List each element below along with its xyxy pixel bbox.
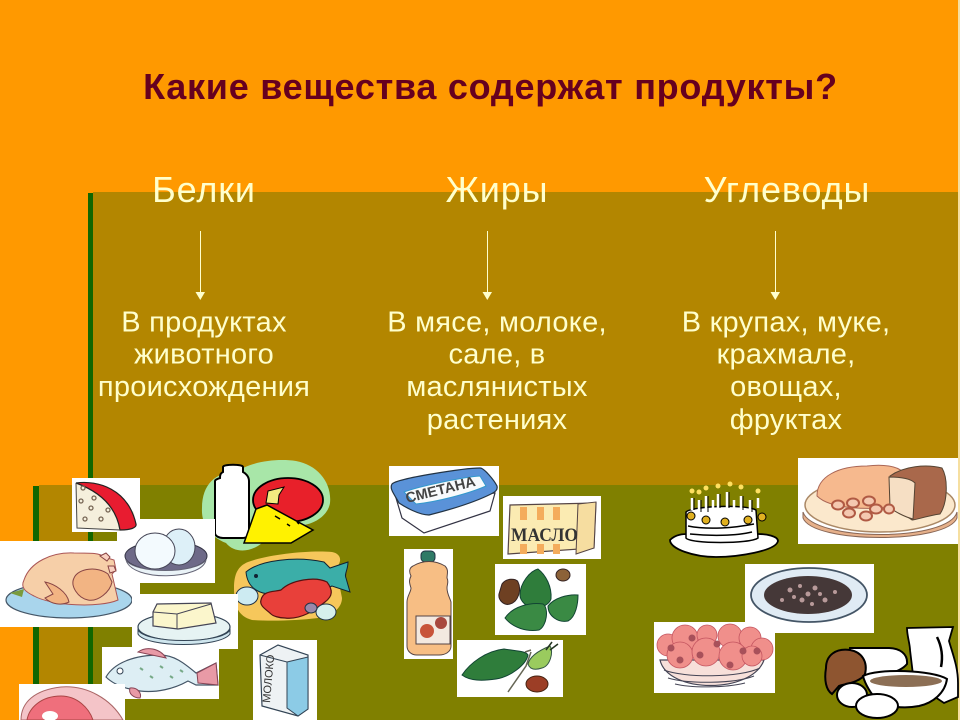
icon: cheese wedge [72,478,140,532]
text block: Жиры: В мясе, молоке, [387,306,607,338]
icon: hazel leaves [495,564,586,635]
arrow: Углеводы [770,231,780,300]
icon: bread basket [798,458,958,544]
icon: butter package [503,496,601,559]
arrow: Жиры [482,231,492,300]
icon: chicken on a plate [0,541,140,627]
text block: Жиры: маслянистых [406,371,588,403]
icon: sour cream [389,466,499,536]
text block: Углеводы: крахмале, [717,338,855,370]
icon: eggs on a plate [117,519,215,583]
icon: milk and cheese [202,460,330,550]
text block: Белки: В продуктах [121,306,287,338]
icon: milk carton: МОЛОКО [261,654,277,703]
text block: Углеводы [682,306,890,436]
heading: Углеводы: Углеводы [704,169,870,210]
title: Какие вещества содержат продукты? [143,66,838,107]
text block: Жиры: растениях [427,404,568,436]
text block: Углеводы: В крупах, муке, [682,306,890,338]
text block: Жиры: сале, в [449,338,545,370]
icon: hazelnut branch [457,640,563,697]
icon: meat [19,684,125,720]
text block: Белки: происхождения [98,371,310,403]
icon: sour cream: СМЕТАНА [404,474,478,507]
text block: Жиры [387,306,607,436]
icon: basket of pastry [654,622,775,693]
icon: milk carton [253,640,317,720]
icon: oil bottle [404,549,453,659]
text block: Углеводы: овощах, [730,371,842,403]
icon: butter package: МАСЛО [511,525,578,546]
icon: fish [102,647,219,699]
text block: Белки [98,306,310,403]
icon: butter on a dish [132,594,238,649]
heading: Белки: Белки [152,169,256,210]
arrow: Белки [196,231,205,300]
text block: Белки: животного [134,338,274,370]
icon: bread, milk and porridge [825,627,958,718]
icon: birthday cake [670,482,778,557]
icon: plate of grain [745,564,874,633]
text block: Углеводы: фруктах [730,404,843,436]
heading: Жиры: Жиры [446,169,548,210]
icon: seafood [234,551,350,621]
